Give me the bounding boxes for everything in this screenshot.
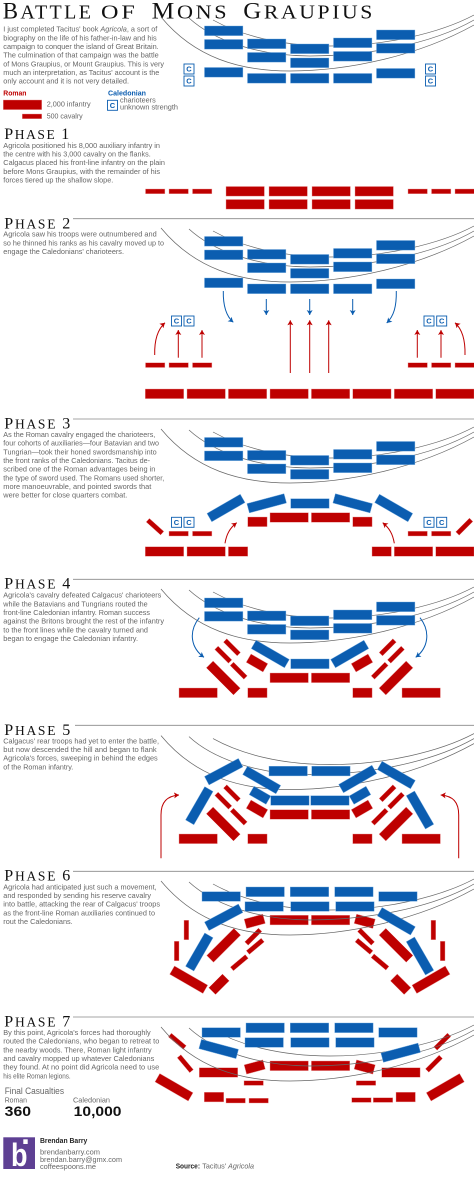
author credits: Brendan Barry: [40, 1138, 87, 1145]
intro text: The culmination of that campaign was the battle: [3, 51, 159, 60]
final casualties: Roman: [5, 1095, 27, 1104]
title: [3, 0, 375, 23]
phase 3 diagram: C: [439, 518, 445, 527]
phase 3 text: [2, 430, 164, 500]
author credits: [40, 1138, 122, 1171]
source: [176, 1162, 254, 1171]
legend: [3, 89, 178, 121]
phase 3 text: scribed one of the Roman advantages being in: [3, 465, 155, 474]
phase 6 diagram: [161, 879, 474, 995]
phase 2 diagram: C: [439, 317, 445, 326]
phase 1 Roman deployment: [146, 186, 474, 209]
phase 7 text: and cavalry mopped up whatever Caledonians: [3, 1054, 155, 1063]
legend: unknown strength: [120, 102, 178, 112]
phase 7 text: routed the Caledonians, who began to retreat to: [3, 1037, 159, 1046]
phase 3 text: As the Roman cavalry engaged the charioteers,: [3, 430, 155, 439]
intro text: I just completed Tacitus' book Agricola, a sort of: [3, 25, 158, 34]
phase 7 text: [3, 1028, 159, 1080]
heading: phase 4: PHASE 4: [4, 576, 70, 593]
phase 3 text: the type of sword used. The Romans used shorter,: [3, 473, 164, 482]
diagram: opening Caledonian deployment: C: [186, 65, 192, 74]
phase 5 text: but now descended the hill and began to flank: [3, 745, 157, 754]
heading: phase 2: PHASE 2: [4, 215, 70, 232]
title: OF: [101, 1, 138, 23]
phase 1 text: Agricola positioned his 8,000 auxiliary infantry in: [3, 141, 160, 150]
phase 4 text: [2, 591, 164, 643]
final casualties: 10,000: [74, 1103, 122, 1119]
source: Source:: [176, 1164, 200, 1171]
phase 2 text: Agricola saw his troops were outnumbered and: [3, 230, 157, 239]
author credits: brendanbarry.com: [40, 1148, 100, 1157]
phase 5 text: Calgacus' rear troops had yet to enter the battle,: [3, 736, 159, 745]
phase 6 text: rout the Caledonians.: [3, 917, 73, 926]
logo: [3, 1137, 35, 1173]
legend: C: [110, 101, 116, 110]
final casualties: Final Casualties: [5, 1086, 64, 1096]
phase 5 text: [3, 736, 159, 771]
phase 2 text: [3, 230, 164, 256]
phase 3 text: Tungrian—took their honed swordsmanship into: [3, 447, 157, 456]
legend: 500 cavalry: [47, 112, 83, 121]
phase 5 text: Agricola's forces, sweeping in behind the edges: [3, 754, 158, 763]
intro text: of Mons Graupius, or Mount Graupius. This is very: [3, 59, 164, 68]
phase 3 diagram: C: [186, 518, 192, 527]
source: Tacitus' Agricola: [202, 1162, 254, 1171]
legend: charioteers: [120, 95, 156, 104]
phase 6 text: [3, 882, 160, 926]
diagram: opening Caledonian deployment: [161, 15, 474, 86]
phase 6 text: and responded by sending his reserve cavalry: [3, 891, 151, 900]
diagram: opening Caledonian deployment: C: [428, 77, 434, 86]
final casualties: Caledonian: [73, 1095, 110, 1104]
phase 4 text: Agricola's cavalry defeated Calgacus' charioteers: [3, 591, 162, 600]
heading: phase 7: PHASE 7: [4, 1014, 70, 1031]
phase 1 text: [3, 141, 165, 184]
intro text: biography on the life of his father-in-law and his: [3, 33, 157, 42]
phase 3 text: four cohorts of auxiliaries—four Batavian and two: [3, 439, 159, 448]
legend: 2,000 infantry: [47, 100, 91, 109]
phase 1 text: Calgacus placed his front-line infantry on the plain: [3, 158, 165, 167]
phase 2 diagram: C: [174, 317, 180, 326]
legend: Roman: [3, 89, 27, 98]
phase 4 text: front-line Caledonian infantry. Roman success: [3, 608, 150, 617]
author credits: coffeespoons.me: [40, 1162, 96, 1171]
logo: b: [11, 1137, 28, 1173]
phase 4 text: while the Batavians and Tungrians routed the: [2, 599, 148, 608]
legend: Caledonian: [108, 89, 146, 98]
phase 2 diagram: C: [186, 317, 192, 326]
phase 3 diagram: C: [174, 518, 180, 527]
phase 4 text: began to engage the Caledonian infantry.: [3, 634, 138, 643]
heading: phase 3: PHASE 3: [4, 415, 70, 432]
heading: phase 1: PHASE 1: [4, 126, 69, 143]
phase 4 text: against the Britons brought the rest of the infantry: [3, 617, 164, 626]
phase 4 text: to the front lines while the cavalry turned and: [3, 625, 148, 634]
author credits: brendan.barry@gmx.com: [40, 1155, 122, 1164]
phase 7 text: By this point, Agricola's forces had thoroughly: [3, 1028, 151, 1037]
phase 2 diagram: [145, 226, 474, 399]
phase 7 diagram: [155, 1023, 474, 1103]
phase 5 diagram: [161, 734, 474, 858]
phase 3 diagram: C: [426, 518, 432, 527]
phase 3 text: the front ranks of the Caledonians. Tacitus de-: [3, 456, 151, 465]
phase 7 text: the nearby woods. There, Roman light infantry: [3, 1045, 152, 1054]
phase 1 text: the centre with his 3,000 cavalry on the flanks.: [3, 150, 151, 158]
phase 7 text: his elite Roman legions.: [3, 1071, 71, 1080]
diagram: opening Caledonian deployment: C: [428, 65, 434, 74]
intro text: [3, 25, 164, 86]
final casualties: [5, 1086, 122, 1119]
heading: phase 5: PHASE 5: [4, 722, 70, 739]
heading: phase 6: PHASE 6: [4, 868, 70, 885]
intro text: campaign to conquer the island of Great Britain.: [3, 42, 159, 51]
phase 3 diagram: [145, 427, 474, 556]
final casualties: 360: [5, 1103, 31, 1119]
phase 4 diagram: [161, 587, 474, 698]
phase 5 text: of the Roman infantry.: [3, 762, 73, 771]
intro text: only account and it is not very detailed.: [3, 77, 129, 86]
phase 3 text: were better for close quarters combat.: [2, 491, 127, 500]
phase 6 text: into battle, attacking the rear of Calgacus' troops: [3, 900, 160, 909]
diagram: opening Caledonian deployment: C: [186, 77, 192, 86]
phase 1 text: before Mons Graupius, with the remainder of his: [3, 167, 160, 176]
phase 2 text: so he thinned his ranks as his cavalry moved up to: [3, 238, 164, 247]
phase 6 text: Agricola had anticipated just such a movement,: [3, 882, 157, 891]
phase 3 text: more manoeuvrable, and pointed swords that: [3, 482, 151, 491]
phase 6 text: as the front-line Roman auxiliaries continued to: [3, 908, 155, 917]
phase 1 text: forces tiered up the shallow slope.: [3, 176, 113, 184]
phase 7 text: they found. At no point did Agricola need to use: [3, 1063, 159, 1072]
intro text: much an interpretation, as Tacitus' account is the: [3, 68, 159, 77]
phase 2 diagram: C: [426, 317, 432, 326]
phase 2 text: engage the Caledonians' charioteers.: [3, 247, 124, 256]
